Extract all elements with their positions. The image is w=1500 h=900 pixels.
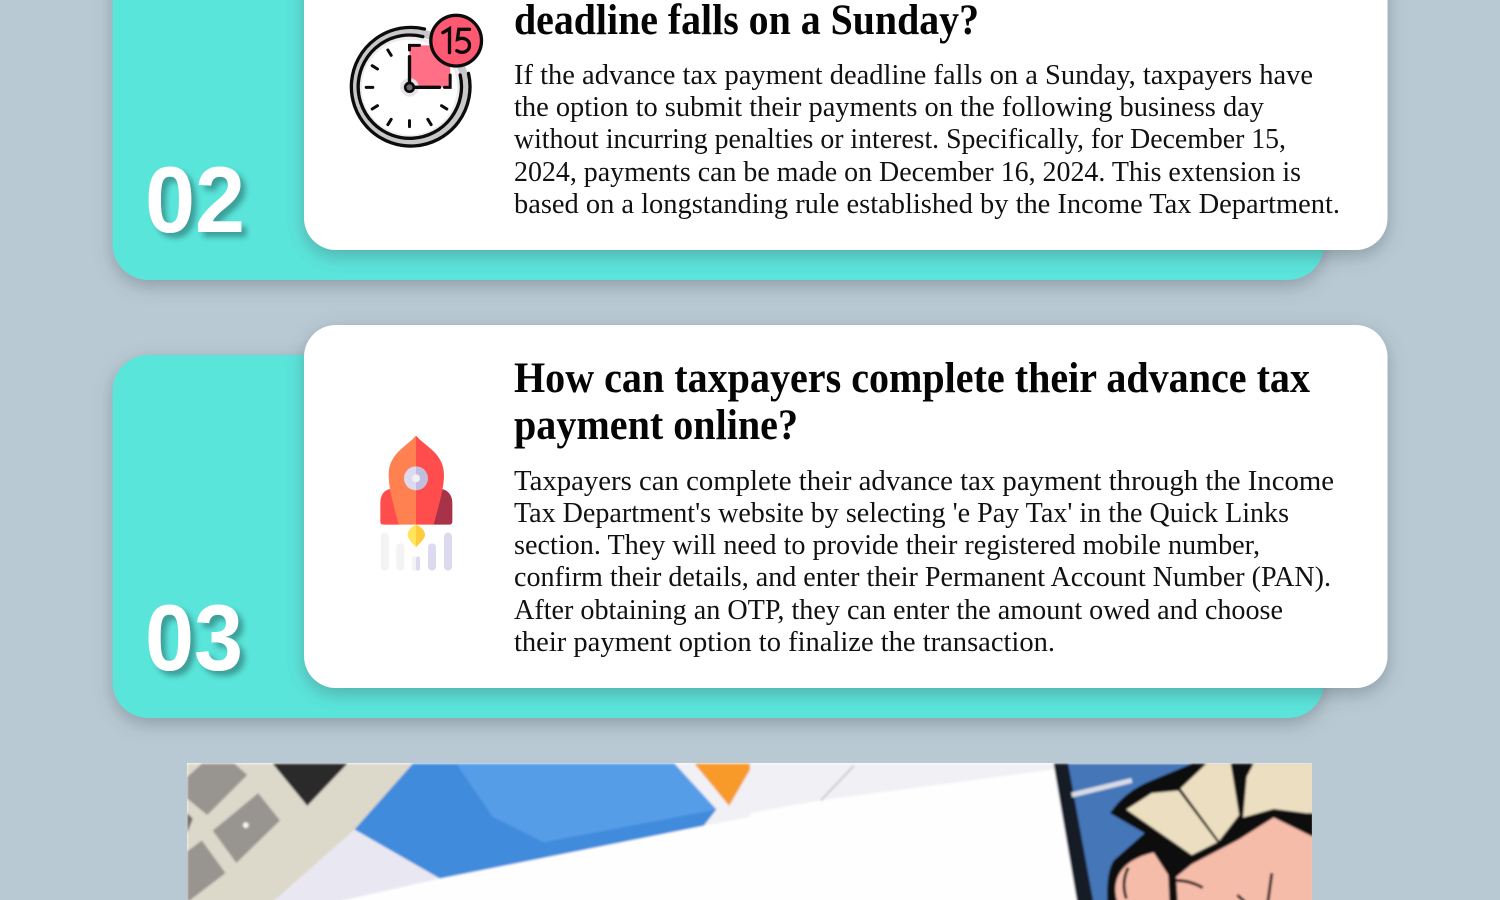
body text 03: Taxpayers can complete their advance tax payment through the Income [514, 465, 1334, 497]
number 03: 03 [145, 585, 243, 690]
body text 03: Tax Department's website by selecting 'e Pay Tax' in the Quick Links [514, 497, 1289, 529]
paper, screen and fist (right part) [750, 764, 1313, 900]
body text 03: section. They will need to provide their registered mobile number, [514, 529, 1260, 561]
body text 03 [514, 465, 1334, 658]
body text 03: After obtaining an OTP, they can enter the amount owed and choose [514, 594, 1283, 626]
icon: clock with 15 badge [350, 15, 481, 147]
heading 03: payment online? [514, 402, 798, 449]
panel: question 02 [112, 0, 1388, 280]
body text 02: If the advance tax payment deadline falls on a Sunday, taxpayers have [514, 59, 1313, 91]
body text 02: 2024, payments can be made on December 16, 2024. This extension is [514, 156, 1301, 188]
body text 02: the option to submit their payments on the following business day [514, 91, 1264, 123]
icon: rocket [380, 436, 452, 571]
body text 02: without incurring penalties or interest. Specifically, for December 15, [514, 123, 1286, 155]
heading 03: How can taxpayers complete their advance tax [514, 355, 1310, 402]
white card 02 [304, 0, 1388, 250]
body text 02 [514, 59, 1340, 220]
body text 03: their payment option to finalize the transaction. [514, 626, 1055, 658]
calculator and chart (left part) [187, 764, 750, 900]
white card 03 [304, 325, 1388, 688]
teal backing 02 [112, 0, 1324, 280]
panel: question 03 [112, 325, 1388, 718]
body text 03: confirm their details, and enter their Permanent Account Number (PAN). [514, 561, 1331, 593]
photo: calculator, chart and fist [187, 763, 1313, 900]
body text 02: based on a longstanding rule established by the Income Tax Department. [514, 188, 1340, 220]
heading 03 [514, 355, 1310, 449]
teal backing 03 [112, 355, 1324, 718]
number 02: 02 [145, 147, 245, 252]
